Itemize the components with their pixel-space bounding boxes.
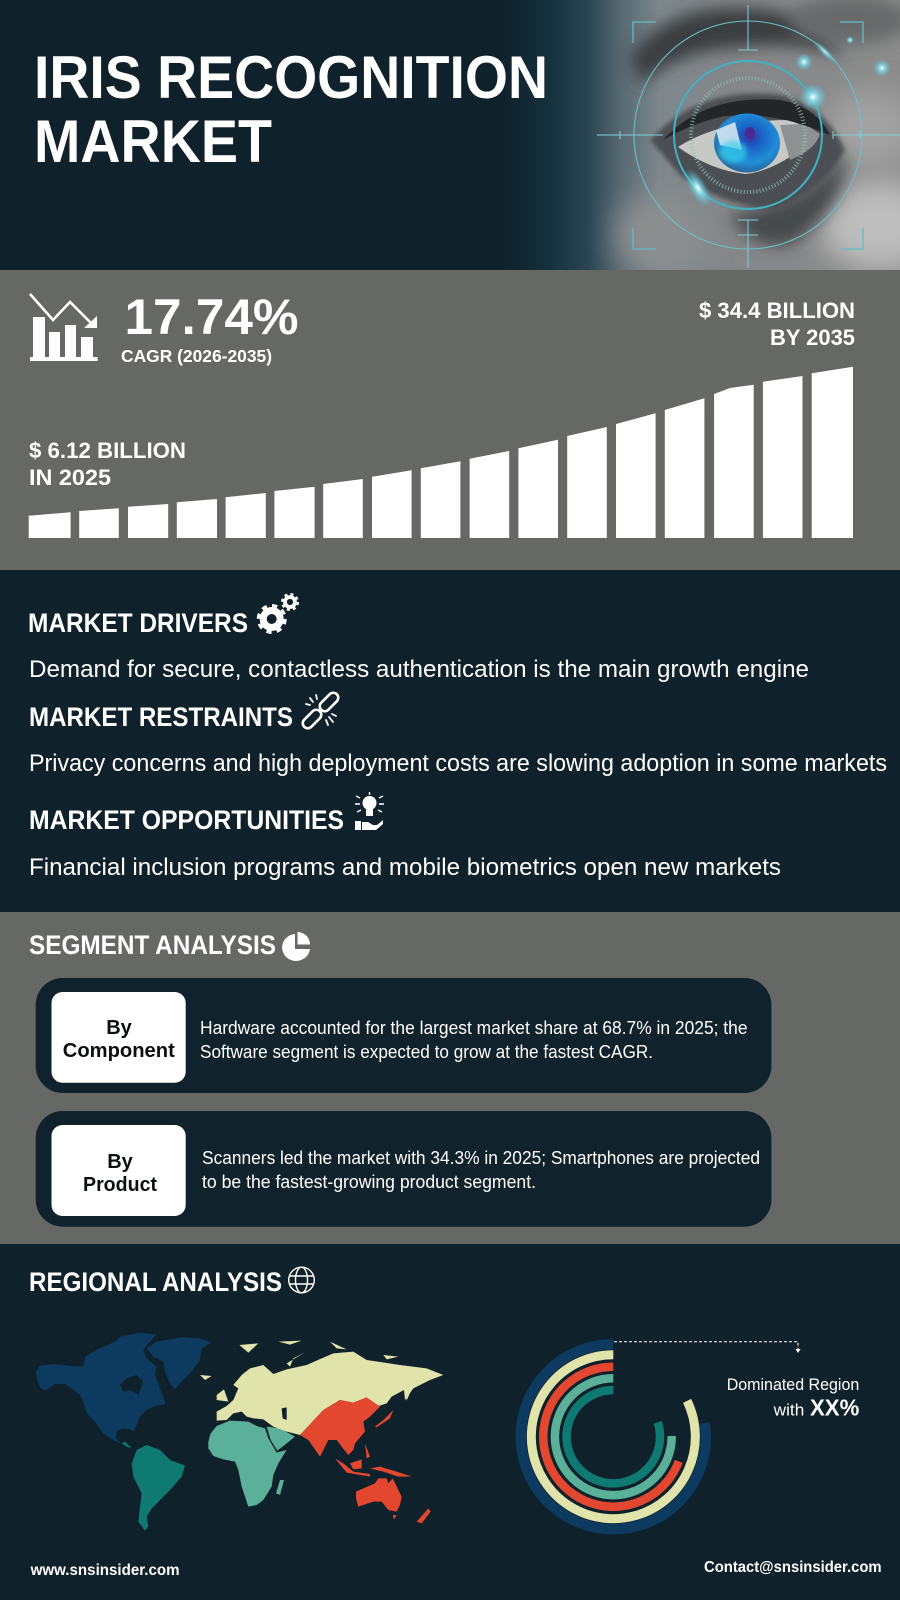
card: by component [36, 978, 771, 1093]
region: asia pacific [300, 1397, 431, 1523]
radial chart [521, 1344, 706, 1529]
panel: market dynamics [28, 594, 887, 881]
callout: dominated region: with [773, 1401, 804, 1420]
end value label: $ 34.4 BILLION [699, 298, 855, 323]
region: europe and northern asia [200, 1341, 443, 1435]
text: drivers: Demand for secure, contactless authentication is the main growth engine [29, 656, 809, 683]
card: by component: Hardware accounted for the largest market share at 68.7% in 2025; the [200, 1018, 748, 1038]
card: by component: By [106, 1017, 133, 1039]
world map [36, 1333, 443, 1531]
end value label: BY 2035 [770, 325, 855, 350]
title: MARKET [34, 108, 272, 175]
callout: dominated region: XX% [810, 1395, 859, 1421]
icon: pie chart [282, 932, 310, 961]
callout: dominated region: Dominated Region [727, 1375, 859, 1394]
card: by product: Product [83, 1174, 157, 1196]
panel: market growth [0, 270, 900, 570]
CAGR label: CAGR (2026-2035) [121, 346, 272, 366]
header photo: scanned eye [500, 0, 900, 275]
arrow: dashed leader line [614, 1342, 800, 1353]
heading: segment analysis: SEGMENT ANALYSIS [29, 930, 276, 960]
card: by product: Scanners led the market with 34.3% in 2025; Smartphones are projected [202, 1148, 760, 1168]
icon: chart with falling arrow [30, 294, 98, 361]
card: by component: Component [63, 1040, 175, 1062]
footer: contact: Contact@snsinsider.com [704, 1559, 882, 1576]
heading: market restraints: MARKET RESTRAINTS [29, 702, 293, 732]
region: africa and middle east [208, 1421, 295, 1507]
heading: regional analysis: REGIONAL ANALYSIS [29, 1267, 282, 1297]
icon: hand with light bulb [355, 792, 384, 830]
bar chart: market growth [29, 367, 853, 538]
icon: gears [259, 594, 298, 632]
text: opportunities: Financial inclusion programs and mobile biometrics open new markets [29, 854, 781, 881]
start value label: $ 6.12 BILLION [29, 438, 186, 463]
panel: segment analysis [0, 912, 900, 1244]
heading: market opportunities: MARKET OPPORTUNITIES [29, 805, 344, 835]
icon: broken chain [301, 691, 340, 730]
card: by product: to be the fastest-growing product segment. [202, 1172, 536, 1192]
end value label [699, 298, 855, 350]
CAGR value: 17.74% [124, 289, 298, 345]
icon: globe [289, 1267, 314, 1293]
footer: website: www.snsinsider.com [30, 1562, 180, 1579]
card: by product: By [107, 1151, 134, 1173]
heading: market drivers: MARKET DRIVERS [28, 608, 248, 638]
text: restraints: Privacy concerns and high deployment costs are slowing adoption in some markets [29, 750, 887, 777]
title: IRIS RECOGNITION [34, 44, 548, 111]
start value label [29, 438, 186, 490]
callout: dominated region [727, 1375, 859, 1421]
title [34, 44, 548, 175]
panel: regional analysis [29, 1267, 859, 1531]
region: south america [122, 1442, 185, 1531]
region: north america [36, 1333, 212, 1444]
scanner rings [597, 5, 900, 268]
card: by product [36, 1111, 771, 1227]
start value label: IN 2025 [29, 465, 111, 490]
card: by component: Software segment is expected to grow at the fastest CAGR. [200, 1042, 653, 1062]
